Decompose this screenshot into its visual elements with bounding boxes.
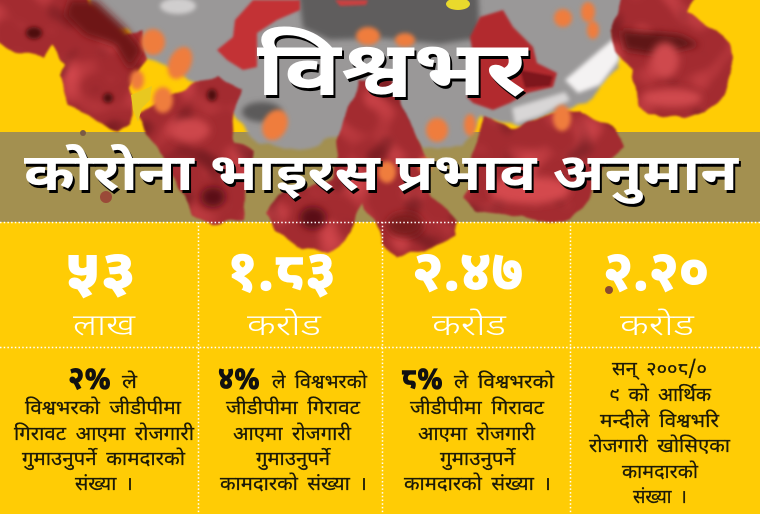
description: आएमा रोजगारी <box>233 423 352 448</box>
description: ९ को आर्थिक <box>609 383 711 409</box>
column 4: 2.20 crore <box>589 240 731 511</box>
description: संख्या । <box>75 473 133 498</box>
description: सन् २००८/० <box>612 358 707 383</box>
description: विश्वभरको जीडीपीमा <box>25 397 182 422</box>
description: मन्दीले विश्वभरि <box>600 409 720 435</box>
column 3: 2.47 crore <box>401 240 555 498</box>
description: २% <box>68 361 111 403</box>
figure: २.२० <box>603 240 709 313</box>
description: ८% <box>401 361 443 403</box>
description <box>401 361 555 498</box>
body shading <box>160 0 619 124</box>
subtitle: कोरोना भाइरस प्रभाव अनुमान <box>24 144 740 211</box>
main title: विश्वभर <box>259 30 531 130</box>
description: गुमाउनुपर्ने <box>256 447 331 473</box>
column 1: 53 lakh <box>14 240 195 498</box>
grey virus body <box>88 0 640 150</box>
yellow spots <box>131 86 152 122</box>
description: आएमा रोजगारी <box>418 423 536 448</box>
description: संख्या । <box>633 486 687 511</box>
description: गुमाउनुपर्ने <box>440 447 516 473</box>
description: गुमाउनुपर्ने कामदारको <box>22 447 186 473</box>
unit: करोड <box>620 308 695 348</box>
description: रोजगारी खोसिएका <box>589 435 731 460</box>
description: जीडीपीमा गिरावट <box>226 397 360 422</box>
description: कामदारको <box>622 461 699 486</box>
unit: करोड <box>247 308 322 348</box>
coronavirus illustration <box>0 0 734 294</box>
description: गिरावट आएमा रोजगारी <box>14 423 195 448</box>
description: ले <box>122 370 138 396</box>
description: ले विश्वभरको <box>454 370 555 396</box>
unit: करोड <box>432 308 507 348</box>
stray specks <box>80 130 86 136</box>
description: जीडीपीमा गिरावट <box>410 397 544 422</box>
figure: २.४७ <box>412 240 523 313</box>
main title: विश्वभर <box>257 27 529 127</box>
description: ४% <box>218 361 260 403</box>
red shading <box>26 0 702 237</box>
figure: १.८३ <box>227 240 336 313</box>
figure: ५३ <box>65 240 136 313</box>
unit: लाख <box>73 309 136 348</box>
description: कामदारको संख्या । <box>220 473 367 498</box>
description <box>14 361 195 498</box>
pixelated upper spikes <box>217 0 557 110</box>
description: ले विश्वभरको <box>272 370 368 396</box>
description <box>218 361 368 498</box>
description <box>589 358 731 511</box>
column 2: 1.83 crore <box>218 240 368 498</box>
subtitle: कोरोना भाइरस प्रभाव अनुमान <box>26 147 742 214</box>
red spike blobs <box>0 0 734 257</box>
orange spots <box>130 2 599 183</box>
description: कामदारको संख्या । <box>404 473 551 498</box>
olive title band <box>0 132 760 222</box>
grid dotted lines <box>0 222 760 514</box>
